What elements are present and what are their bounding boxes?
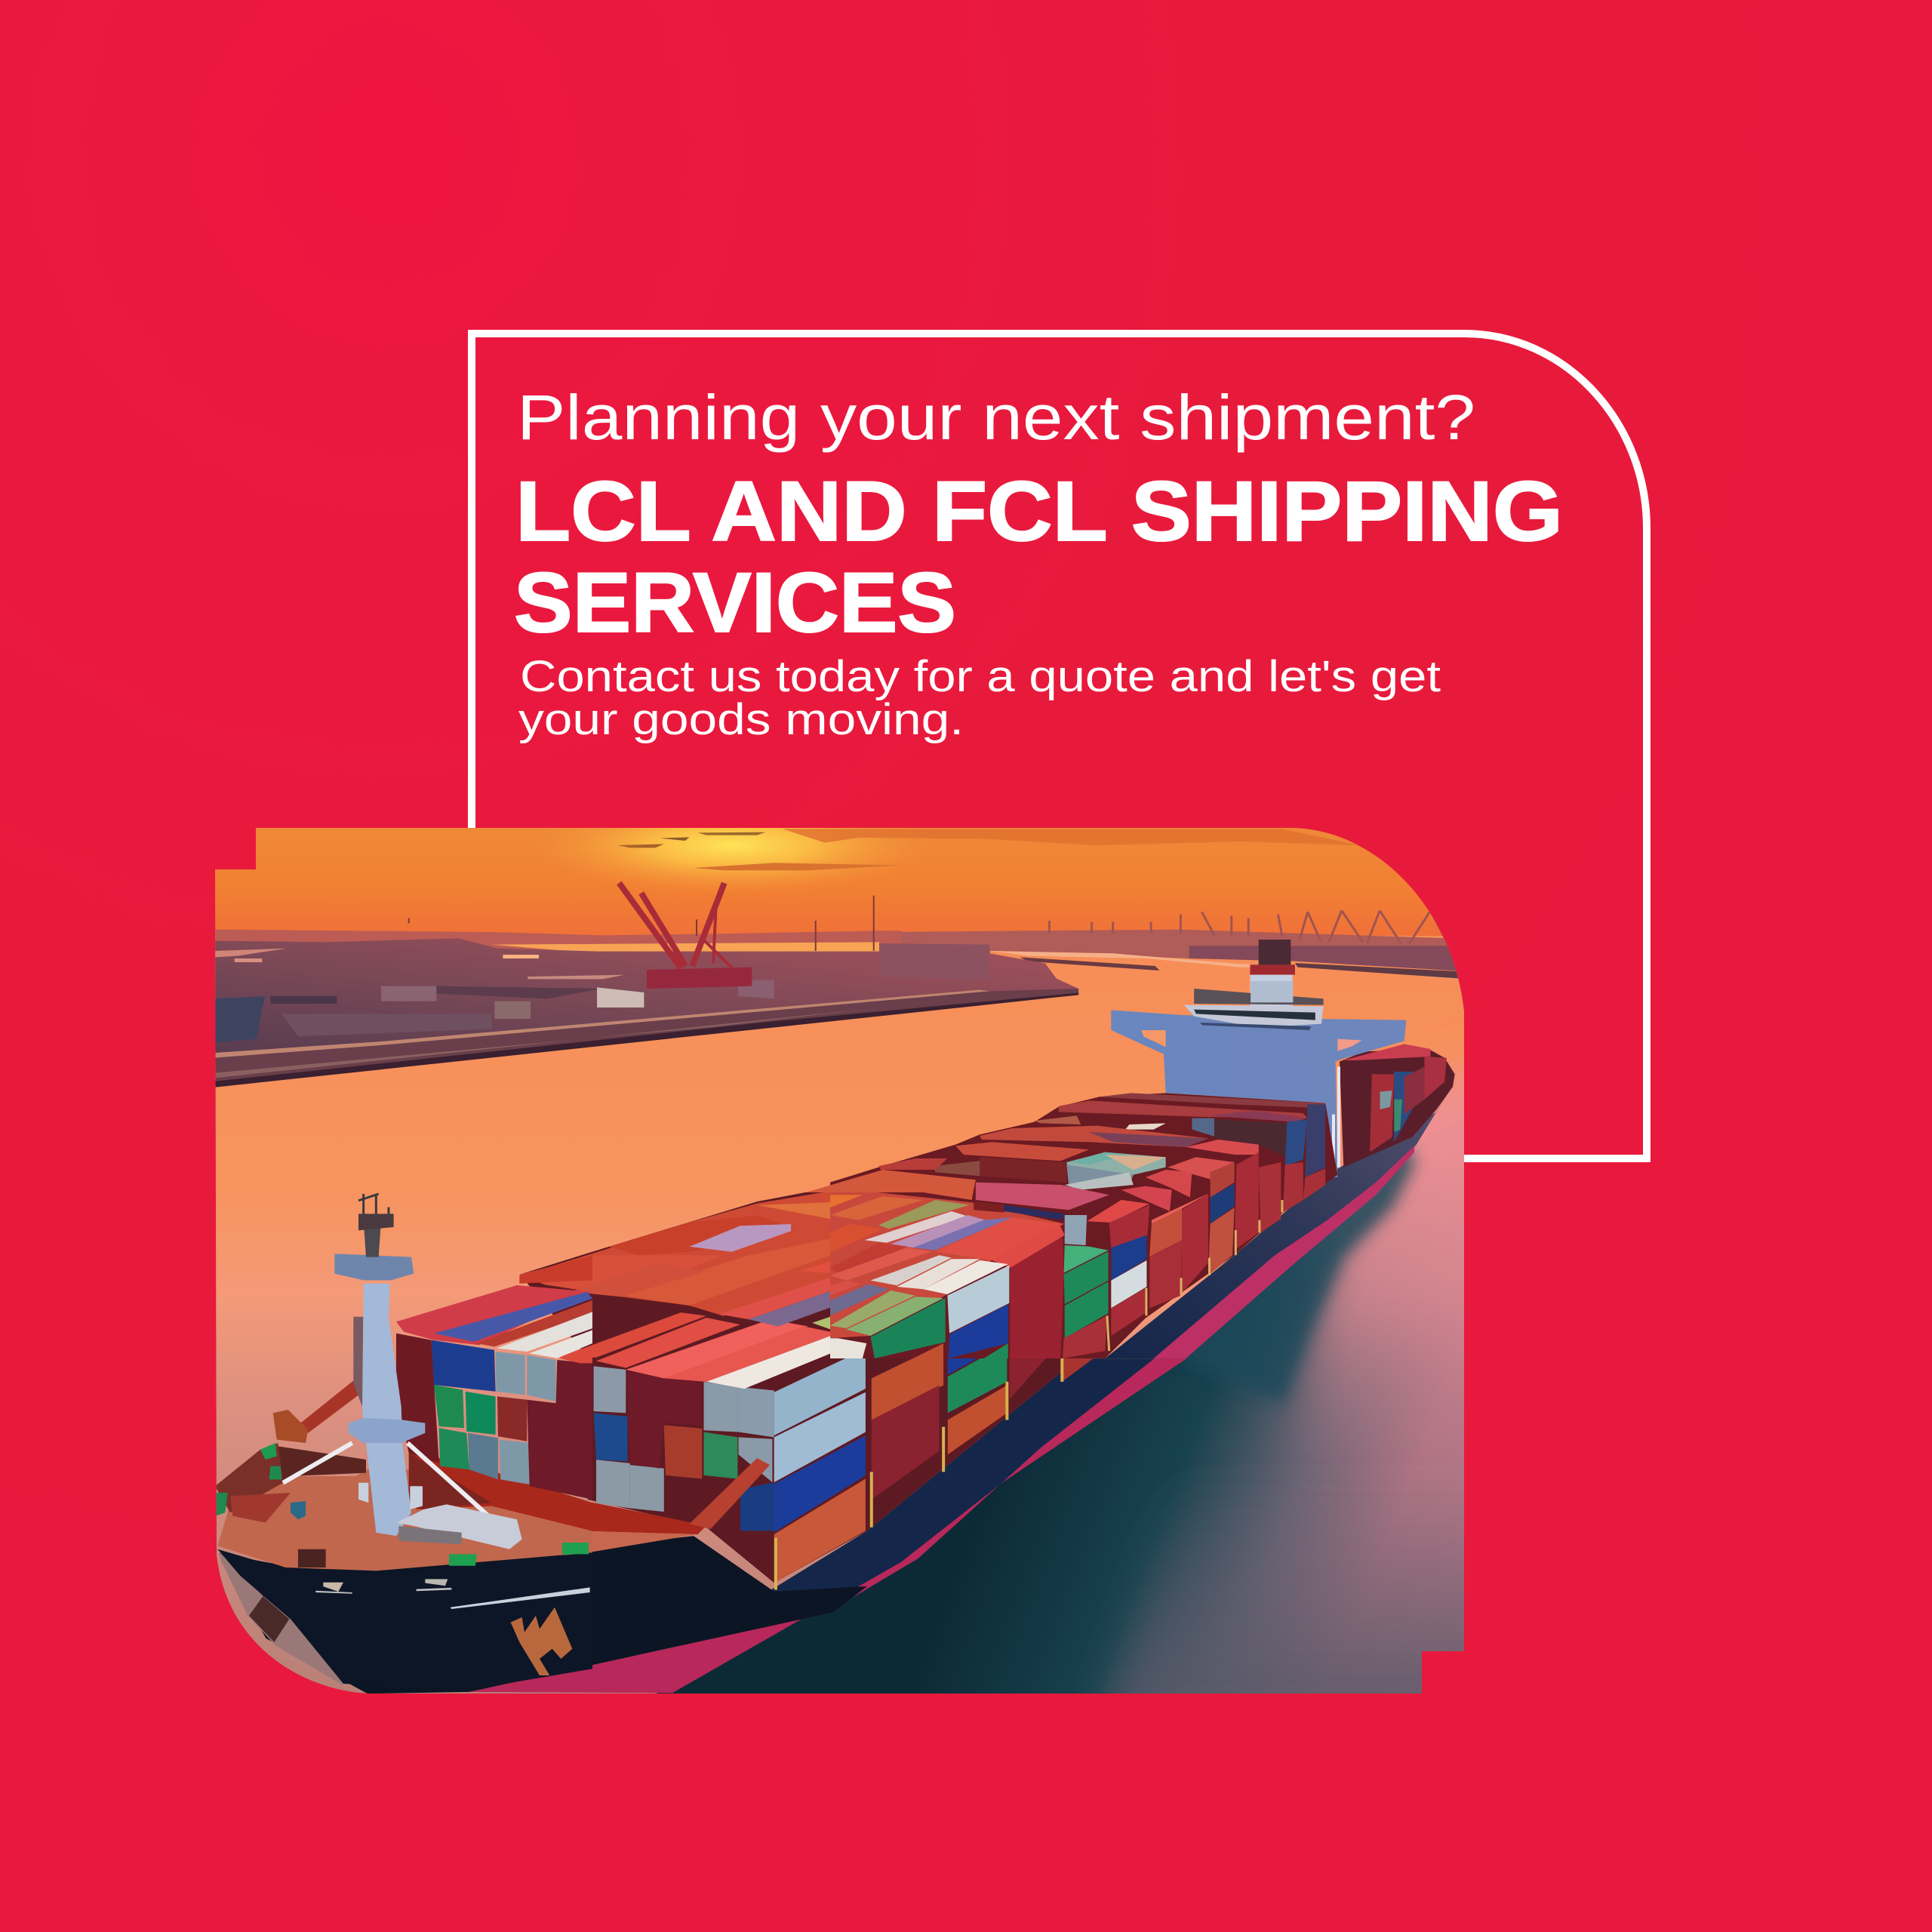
buildings xyxy=(494,980,774,1019)
lower ship, midsection and hull xyxy=(220,1188,1232,1694)
midship upper tier xyxy=(1035,1093,1325,1213)
container tops xyxy=(520,1191,969,1389)
quayside patch xyxy=(220,1552,343,1685)
midship red deck base xyxy=(830,1187,1065,1338)
body line 1: Contact us today for a quote and let's get xyxy=(520,652,1441,701)
distant scene xyxy=(528,795,1460,1011)
heading line 2: SERVICES xyxy=(514,555,956,650)
deck xyxy=(592,1531,698,1552)
subtitle: Planning your next shipment? xyxy=(517,382,1475,453)
land texture xyxy=(215,949,625,1043)
sky xyxy=(211,823,1472,951)
black bow hull xyxy=(217,1549,592,1690)
distant water xyxy=(492,942,880,952)
bridge superstructure xyxy=(1111,981,1406,1177)
side containers xyxy=(396,1334,592,1500)
anchor xyxy=(511,1607,572,1675)
text block xyxy=(514,382,1563,744)
water xyxy=(211,936,1509,1736)
gold lashing struts xyxy=(776,1316,1109,1589)
breakwaters xyxy=(990,951,1460,979)
midship container faces xyxy=(1010,1152,1281,1358)
stern containers xyxy=(1340,1044,1455,1168)
bulwark xyxy=(278,1446,592,1531)
container tops xyxy=(396,1255,592,1363)
midship middle tier xyxy=(878,1126,1259,1211)
pink boot stripe xyxy=(1154,1146,1414,1358)
photo: container ship at sunset xyxy=(215,828,1464,1694)
bow gear xyxy=(215,1377,589,1567)
loading crane arm xyxy=(689,1458,770,1529)
hull name markings xyxy=(315,1579,590,1609)
far port with cranes xyxy=(875,911,1460,971)
quay bank xyxy=(215,989,1078,1088)
sun and clouds xyxy=(528,795,1358,896)
red crane xyxy=(409,883,874,989)
funnel xyxy=(1250,940,1295,1011)
black hull xyxy=(220,1536,867,1694)
foremast xyxy=(283,1194,522,1549)
bow of the ship xyxy=(215,1194,592,1690)
port and quay xyxy=(215,883,1078,1088)
container yard lamps xyxy=(562,1541,588,1555)
midship lower tier tops xyxy=(806,1170,1109,1358)
front containers xyxy=(520,1188,1232,1583)
body line 2: your goods moving. xyxy=(518,695,964,744)
infographic canvas xyxy=(215,330,1651,1694)
pink boot stripe xyxy=(469,1358,1186,1693)
midship containers base xyxy=(830,1093,1337,1358)
land xyxy=(215,938,1078,1059)
hull side xyxy=(765,1358,1155,1611)
hull side xyxy=(1105,1081,1455,1358)
upper ship, bridge and stern xyxy=(806,981,1455,1358)
main deck xyxy=(217,1469,592,1571)
horizon haze xyxy=(215,930,901,968)
gold lashing struts xyxy=(1107,1200,1282,1351)
white rounded frame xyxy=(472,334,1647,1158)
heading line 1: LCL AND FCL SHIPPING xyxy=(515,464,1563,558)
storage tank xyxy=(879,944,989,980)
